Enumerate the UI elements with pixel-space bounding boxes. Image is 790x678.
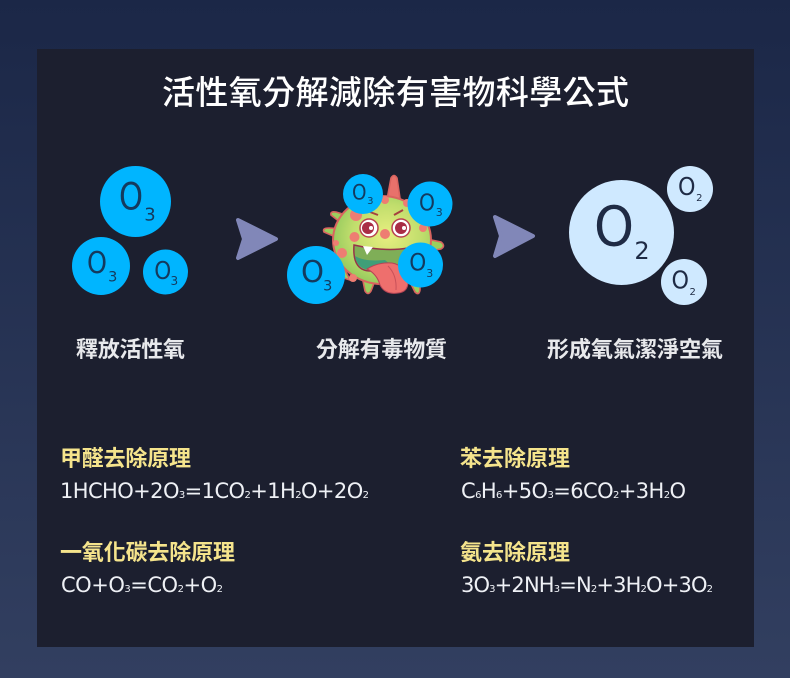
oxygen group	[569, 166, 713, 305]
mouth and tongue	[354, 245, 408, 293]
ozone bubble top left: O	[352, 180, 366, 204]
heading: carbon monoxide: 一氧化碳去除原理	[60, 540, 235, 565]
ozone bubble bottom left: 3	[323, 278, 332, 294]
heading: formaldehyde: 甲醛去除原理	[60, 446, 191, 471]
ozone bubble right: O	[154, 256, 171, 285]
ozone bubble top left: 3	[367, 196, 373, 207]
oxygen bubble top: 2	[696, 193, 702, 204]
ozone release group	[72, 166, 188, 295]
ozone bubble large: 3	[144, 204, 156, 226]
heading: ammonia: 氨去除原理	[460, 540, 570, 565]
heading: benzene: 苯去除原理	[460, 446, 570, 471]
ozone bubble right	[143, 250, 188, 294]
ozone bubble left: O	[87, 246, 107, 281]
ozone bubble top right: 3	[436, 206, 443, 219]
formula: benzene: C6H6+5O3=6CO2+3H2O	[461, 479, 686, 503]
toxin breakdown group	[287, 174, 452, 304]
ozone bubble bottom left: O	[301, 255, 324, 290]
arrow 2	[495, 217, 533, 256]
ozone bubble right: 3	[170, 274, 178, 288]
ozone bubble large	[100, 166, 171, 237]
label: decompose toxins: 分解有毒物質	[316, 337, 447, 362]
oxygen bubble top: O	[678, 172, 696, 201]
oxygen bubble large: O	[594, 194, 634, 258]
spots	[333, 196, 427, 282]
oxygen bubble large	[569, 180, 674, 285]
oxygen bubble top	[667, 166, 713, 212]
ozone bubble left	[72, 237, 130, 295]
label: clean air: 形成氧氣潔淨空氣	[547, 337, 723, 362]
ozone bubble large: O	[119, 176, 143, 218]
ozone bubble bottom right	[398, 242, 443, 288]
ozone bubble top left	[343, 174, 383, 214]
oxygen bubble bottom: 2	[690, 287, 696, 298]
icon: virus monster	[324, 176, 444, 294]
formula: formaldehyde: 1HCHO+2O3=1CO2+1H2O+2O2	[60, 479, 369, 503]
formula: ammonia: 3O3+2NH3=N2+3H2O+3O2	[461, 573, 713, 597]
title: 活性氧分解減除有害物科學公式	[162, 74, 629, 111]
ozone bubble bottom left	[287, 246, 345, 304]
ozone bubble top right	[408, 182, 452, 226]
oxygen bubble bottom: O	[672, 266, 689, 294]
oxygen bubble bottom	[661, 259, 707, 305]
ozone bubble bottom right: 3	[426, 267, 433, 280]
ozone bubble top right: O	[419, 188, 435, 216]
ozone bubble bottom right: O	[409, 248, 426, 276]
oxygen bubble large: 2	[634, 237, 650, 265]
arrow 1	[238, 220, 276, 258]
ozone bubble left: 3	[108, 270, 117, 286]
formula: carbon monoxide: CO+O3=CO2+O2	[61, 573, 223, 597]
label: release ozone: 釋放活性氧	[76, 337, 185, 362]
eyes	[360, 210, 410, 237]
